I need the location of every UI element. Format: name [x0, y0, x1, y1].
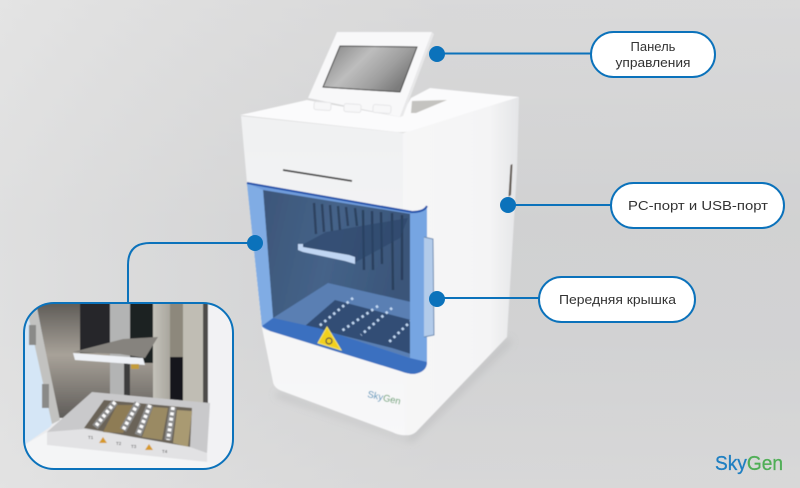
- logo: SkyGen: SkyGen: [715, 453, 783, 475]
- slot labels: T3: [131, 444, 137, 449]
- slot labels: T1: [88, 435, 94, 440]
- rear port: [508, 164, 512, 197]
- callout: control panel: Панель: [631, 39, 676, 54]
- device front face: [241, 116, 410, 435]
- connector: interior inset: [128, 235, 263, 304]
- vertical black column array: [80, 303, 110, 353]
- right steel panels: [153, 303, 170, 403]
- right white wall: [207, 304, 213, 419]
- slot labels: [88, 435, 168, 454]
- interior: [263, 190, 411, 358]
- carriage platform: [73, 337, 158, 358]
- device shadow: [275, 338, 512, 442]
- connector: control panel: [429, 46, 592, 62]
- cover bottom ledge: [262, 318, 427, 374]
- rear wall: [36, 304, 154, 419]
- slot labels: T2: [116, 441, 122, 446]
- screen: [323, 46, 417, 92]
- front cover: transparent blue: [247, 183, 434, 374]
- callout: control panel: [591, 32, 715, 77]
- rear wall column comb: [314, 203, 402, 290]
- left side of cover: [247, 183, 273, 326]
- lower front: [26, 434, 206, 468]
- tray rails: [318, 298, 412, 343]
- callout: control panel: управления: [616, 55, 690, 70]
- carriage shadow band: [300, 218, 408, 262]
- device logo: SkyGen: [366, 389, 402, 408]
- lid opening: [411, 100, 447, 113]
- slot on the front: [283, 170, 352, 181]
- right side of cover: [410, 207, 427, 370]
- tray rails: [95, 402, 173, 440]
- callout: front cover: [539, 277, 695, 322]
- gripper bar: [298, 244, 355, 264]
- callout: ports: [611, 183, 784, 228]
- connector: ports: [500, 197, 612, 213]
- tray floor recess: [84, 400, 192, 447]
- callout: ports: PC-порт и USB-порт: [628, 198, 768, 213]
- front label strip: [47, 429, 207, 462]
- cover top edge: [247, 183, 427, 212]
- device: automated instrument: [240, 32, 519, 442]
- device top lid: [240, 88, 519, 132]
- slot labels: T4: [162, 449, 168, 454]
- connector: front cover: [429, 291, 540, 307]
- callout: front cover: Передняя крышка: [559, 292, 677, 307]
- control panel: [308, 32, 434, 117]
- central rail: [110, 303, 130, 403]
- panel buttons: [314, 101, 391, 114]
- tray plate: [47, 392, 210, 453]
- inset photo: device interior: [24, 303, 233, 469]
- tray floor: [273, 283, 411, 358]
- handle: [424, 237, 434, 337]
- door panel left: [25, 309, 52, 444]
- door hinges: [29, 325, 36, 345]
- warning triangles: [99, 437, 107, 443]
- device side face: [403, 97, 519, 435]
- biohazard warning label: [318, 327, 341, 350]
